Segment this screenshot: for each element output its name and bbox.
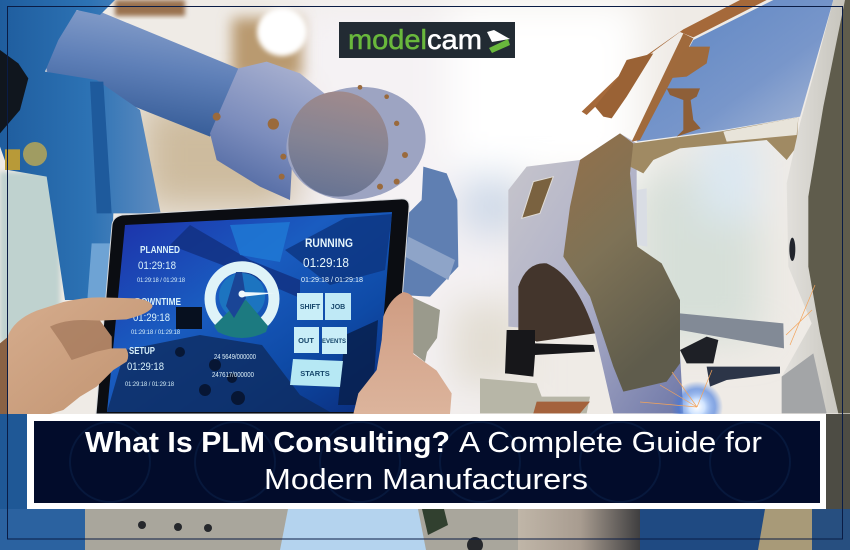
- status: downtime: 01:29:18: [133, 312, 170, 324]
- status: planned: PLANNED: [140, 244, 180, 256]
- fixture block: [480, 378, 590, 413]
- knob: [23, 142, 47, 166]
- window glass: [637, 0, 833, 142]
- bolts: [213, 85, 408, 190]
- status: planned: 01:29:18 / 01:29:18: [137, 277, 185, 284]
- arm tube: [42, 8, 242, 137]
- counters: [212, 354, 256, 379]
- title text: [85, 427, 762, 496]
- button: shift: [297, 293, 323, 320]
- side and bottom strip: [0, 414, 850, 550]
- status: downtime: 01:29:18 / 01:29:18: [131, 329, 180, 336]
- logo: model: [348, 24, 427, 55]
- title text: Modern Manufacturers: [264, 464, 588, 496]
- status: running: [301, 236, 363, 284]
- robot shoulder and column: [0, 0, 161, 300]
- button: out: [294, 327, 319, 353]
- column shadow: [90, 82, 112, 213]
- button: starts: [290, 359, 343, 387]
- counters: 24 5649/000000: [214, 354, 256, 361]
- button: starts: STARTS: [300, 369, 330, 378]
- logo: cam: [427, 24, 482, 55]
- rail gusset: [595, 53, 653, 118]
- status: planned: [137, 244, 185, 284]
- wheel arch: [518, 263, 595, 342]
- button: events: EVENTS: [322, 339, 346, 345]
- title text: What Is PLM Consulting?: [85, 427, 450, 459]
- welding sparks: [640, 285, 815, 433]
- status: running: 01:29:18 / 01:29:18: [301, 275, 363, 284]
- status: running: RUNNING: [305, 236, 353, 250]
- disc ring: [277, 76, 435, 211]
- car body frame: [480, 0, 850, 413]
- status: setup: 01:29:18: [127, 361, 164, 373]
- right hand holding tablet: [353, 292, 452, 414]
- button: out: OUT: [298, 336, 314, 345]
- tablet: [96, 199, 409, 414]
- status: setup: 01:29:18 / 01:29:18: [125, 381, 174, 388]
- lower rail: [680, 313, 784, 348]
- pillar: [563, 133, 680, 392]
- button: shift: SHIFT: [300, 304, 321, 311]
- status: planned: 01:29:18: [138, 260, 176, 272]
- right door pillar: [782, 0, 850, 413]
- light column patch: [87, 243, 113, 300]
- robot arm: [0, 0, 458, 300]
- gauge: [210, 267, 276, 338]
- upper cross rail: [630, 117, 798, 173]
- counters: 247617/000000: [212, 372, 254, 379]
- panel vent: [522, 177, 553, 218]
- bracket: [5, 149, 20, 170]
- grey robot post: [412, 297, 440, 362]
- perforated strip: [637, 188, 647, 247]
- a-pillar: [632, 33, 693, 142]
- status: running: 01:29:18: [303, 255, 349, 270]
- button: events: [322, 327, 347, 354]
- logo: [339, 22, 515, 58]
- mirror bracket: [667, 47, 710, 78]
- elbow sleeve: [210, 62, 328, 200]
- faint icon circles: [70, 422, 790, 502]
- forearm: [400, 167, 458, 297]
- lower bracket: [505, 330, 595, 377]
- title panel: [27, 414, 826, 509]
- tablet screen: [107, 212, 392, 412]
- button: job: JOB: [331, 304, 345, 311]
- status: downtime: DOWNTIME: [135, 296, 181, 308]
- status: downtime: [131, 296, 181, 336]
- icon: chevron: [487, 30, 510, 53]
- dark cable: [0, 50, 28, 133]
- title text: A Complete Guide for: [459, 427, 762, 459]
- clamp arm: [667, 88, 701, 137]
- door pillar shadow: [808, 0, 850, 413]
- disc face: [288, 91, 388, 197]
- roof rail: [582, 0, 767, 115]
- left hand pointing: [0, 297, 153, 423]
- tablet bezel: [96, 199, 409, 414]
- quarter panel: [508, 133, 683, 413]
- button: job: [325, 293, 351, 320]
- screen background shapes: [107, 214, 392, 412]
- status: setup: SETUP: [129, 345, 155, 357]
- status: setup: [125, 345, 174, 388]
